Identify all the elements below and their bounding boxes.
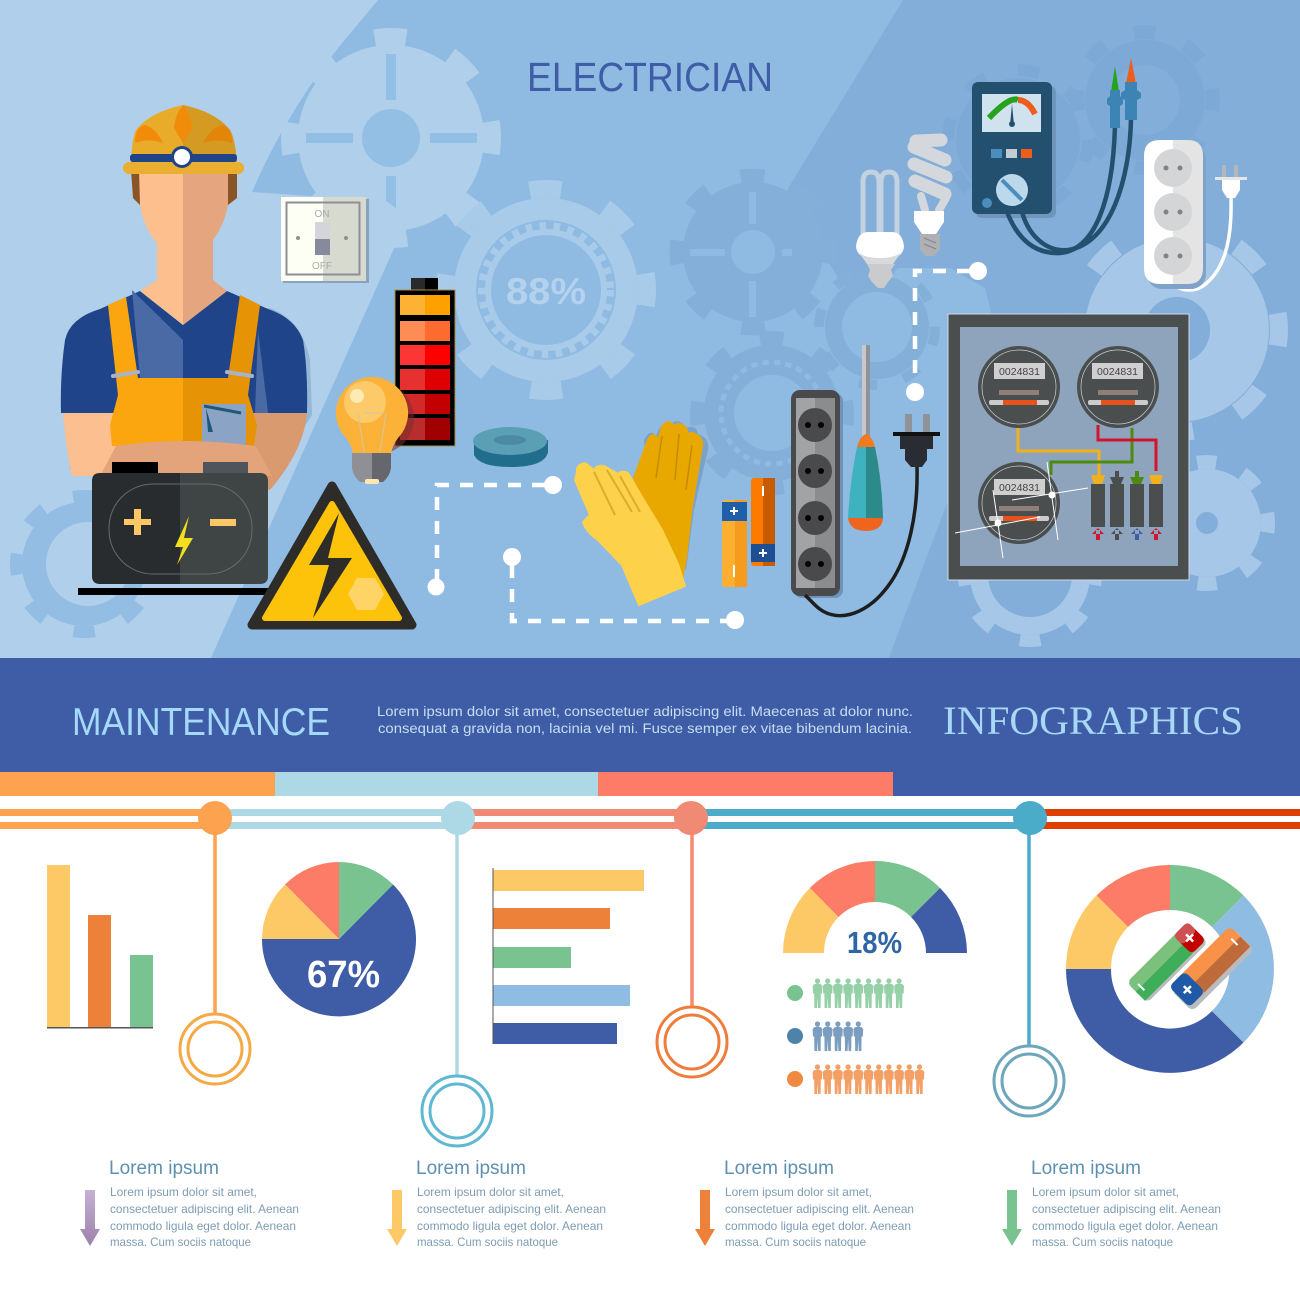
AA batteries <box>722 478 775 587</box>
pie chart <box>262 862 416 1016</box>
light bulb <box>336 377 414 484</box>
light switch: OFF <box>312 261 332 272</box>
legend row orange <box>787 1064 924 1094</box>
note 1 text: consectetuer adipiscing elit. Aenean <box>110 1202 299 1216</box>
semicircle gauge <box>783 861 967 960</box>
back glove shadow <box>644 421 708 570</box>
gear: lower centre <box>698 339 846 487</box>
dashed connector 2 <box>503 548 744 629</box>
banner text block: consequat a gravida non, lacinia vel mi. Fusce semper ex vitae bibendum lacinia. <box>378 721 912 736</box>
note 3 text <box>724 1158 914 1249</box>
screwdriver <box>848 345 883 531</box>
gear: lower right <box>1146 462 1268 584</box>
horizontal bar chart <box>492 868 644 1044</box>
header background <box>0 0 1300 660</box>
pie chart: 67% <box>307 954 380 996</box>
shirt <box>61 290 307 413</box>
meter 2: 0024831 <box>1097 366 1138 378</box>
legend row blue <box>787 1021 863 1051</box>
small plug <box>1215 165 1247 198</box>
arrow: orange <box>695 1190 715 1246</box>
multimeter with probes <box>972 58 1141 253</box>
meter 2 <box>1077 346 1159 428</box>
timeline node 2 <box>422 801 492 1146</box>
note 2 text: Lorem ipsum <box>416 1158 526 1179</box>
timeline <box>0 801 1300 1146</box>
people legend <box>787 978 924 1094</box>
gear: large right <box>1075 228 1279 432</box>
CFL bulb spiral <box>914 140 946 256</box>
helmet <box>123 105 244 174</box>
note 1 text: commodo ligula eget dolor. Aenean <box>110 1219 296 1233</box>
legend row green <box>787 978 904 1008</box>
meter 3: 0024831 <box>999 482 1040 494</box>
donut batteries <box>1127 922 1255 1012</box>
gear: bottom right <box>964 509 1096 641</box>
note 4 text: commodo ligula eget dolor. Aenean <box>1032 1219 1218 1233</box>
front glove <box>575 463 685 605</box>
fuses <box>1091 471 1163 540</box>
note 1 <box>80 1158 299 1249</box>
arrow: yellow <box>387 1190 407 1246</box>
note 2 text: commodo ligula eget dolor. Aenean <box>417 1219 603 1233</box>
gear: top right <box>1077 32 1213 168</box>
neck <box>140 240 183 325</box>
column bar chart <box>47 865 153 1028</box>
gear: centre dark <box>677 176 829 328</box>
plug with cord <box>805 414 940 616</box>
wires <box>1018 425 1156 475</box>
note 4 text: Lorem ipsum <box>1031 1158 1141 1179</box>
hair <box>131 170 237 205</box>
electrician worker <box>61 105 312 490</box>
note 2 text: consectetuer adipiscing elit. Aenean <box>417 1202 606 1216</box>
battery 2 <box>751 478 775 566</box>
CFL bulb U-tube <box>856 172 904 288</box>
electric meter box <box>948 314 1189 580</box>
sparks <box>955 462 1088 558</box>
pocket <box>202 404 246 445</box>
light switch <box>281 197 369 283</box>
gear: 88 percent <box>445 189 647 391</box>
note 4 text: consectetuer adipiscing elit. Aenean <box>1032 1202 1221 1216</box>
body shadow <box>64 308 312 470</box>
white power strip <box>1144 140 1247 290</box>
arrow: purple <box>80 1190 100 1246</box>
note 1 text: Lorem ipsum <box>109 1158 219 1179</box>
meter 1 <box>978 346 1060 428</box>
gear: bottom left <box>16 496 152 632</box>
rubber gloves <box>575 421 708 605</box>
gear: top left <box>290 37 492 239</box>
note 3 text: commodo ligula eget dolor. Aenean <box>725 1219 911 1233</box>
banner text block: Lorem ipsum dolor sit amet, consectetuer adipiscing elit. Maecenas at dolor nunc. <box>377 704 913 719</box>
timeline node 3 <box>657 801 727 1077</box>
note 4 text: massa. Cum sociis natoque <box>1032 1235 1173 1249</box>
meter 1: 0024831 <box>999 366 1040 378</box>
note 3 text: Lorem ipsum dolor sit amet, <box>725 1185 872 1199</box>
note 3 text: consectetuer adipiscing elit. Aenean <box>725 1202 914 1216</box>
note 2 text: massa. Cum sociis natoque <box>417 1235 558 1249</box>
timeline node 4 <box>994 801 1064 1116</box>
note 1 text: Lorem ipsum dolor sit amet, <box>110 1185 257 1199</box>
note 1 text <box>109 1158 299 1249</box>
probes <box>1107 58 1141 128</box>
note 4 <box>1002 1158 1221 1249</box>
note 4 text <box>1031 1158 1221 1249</box>
timeline node 1 <box>180 801 250 1084</box>
note 3 text: massa. Cum sociis natoque <box>725 1235 866 1249</box>
white cord <box>1172 198 1231 290</box>
light switch: ON <box>314 209 330 220</box>
banner text block <box>377 704 913 736</box>
gear: behind multimeter <box>948 70 1088 210</box>
title: ELECTRICIAN <box>527 54 773 100</box>
banner heading: maintenance: MAINTENANCE <box>72 701 330 744</box>
semicircle gauge: 18% <box>847 925 902 960</box>
overalls <box>108 295 260 446</box>
tall battery gauge <box>395 278 455 446</box>
note 3 text: Lorem ipsum <box>724 1158 834 1179</box>
warning triangle <box>252 486 412 625</box>
note 3 <box>695 1158 914 1249</box>
colour strip <box>0 772 893 796</box>
insulating tape <box>473 427 548 467</box>
note 4 text: Lorem ipsum dolor sit amet, <box>1032 1185 1179 1199</box>
banner <box>0 658 1300 796</box>
note 2 text: Lorem ipsum dolor sit amet, <box>417 1185 564 1199</box>
note 1 text: massa. Cum sociis natoque <box>110 1235 251 1249</box>
gear: 88 percent: 88% <box>506 271 586 312</box>
donut chart <box>1066 865 1274 1073</box>
car battery <box>78 462 270 595</box>
gear: behind bulb <box>819 269 935 385</box>
note 2 text <box>416 1158 606 1249</box>
battery 1 <box>722 500 747 587</box>
forearms <box>63 413 307 490</box>
dashed connector 1 <box>428 476 562 596</box>
power strip dark <box>791 390 843 598</box>
crossed arm <box>100 441 272 476</box>
meter 3 <box>978 462 1060 544</box>
background gears <box>16 32 1279 641</box>
dashed connector 3 <box>906 262 987 401</box>
cables <box>1007 118 1131 253</box>
note 2 <box>387 1158 606 1249</box>
banner heading: infographics: INFOGRAPHICS <box>943 698 1243 743</box>
back glove <box>634 422 702 580</box>
arrow: green <box>1002 1190 1022 1246</box>
face <box>139 170 183 251</box>
